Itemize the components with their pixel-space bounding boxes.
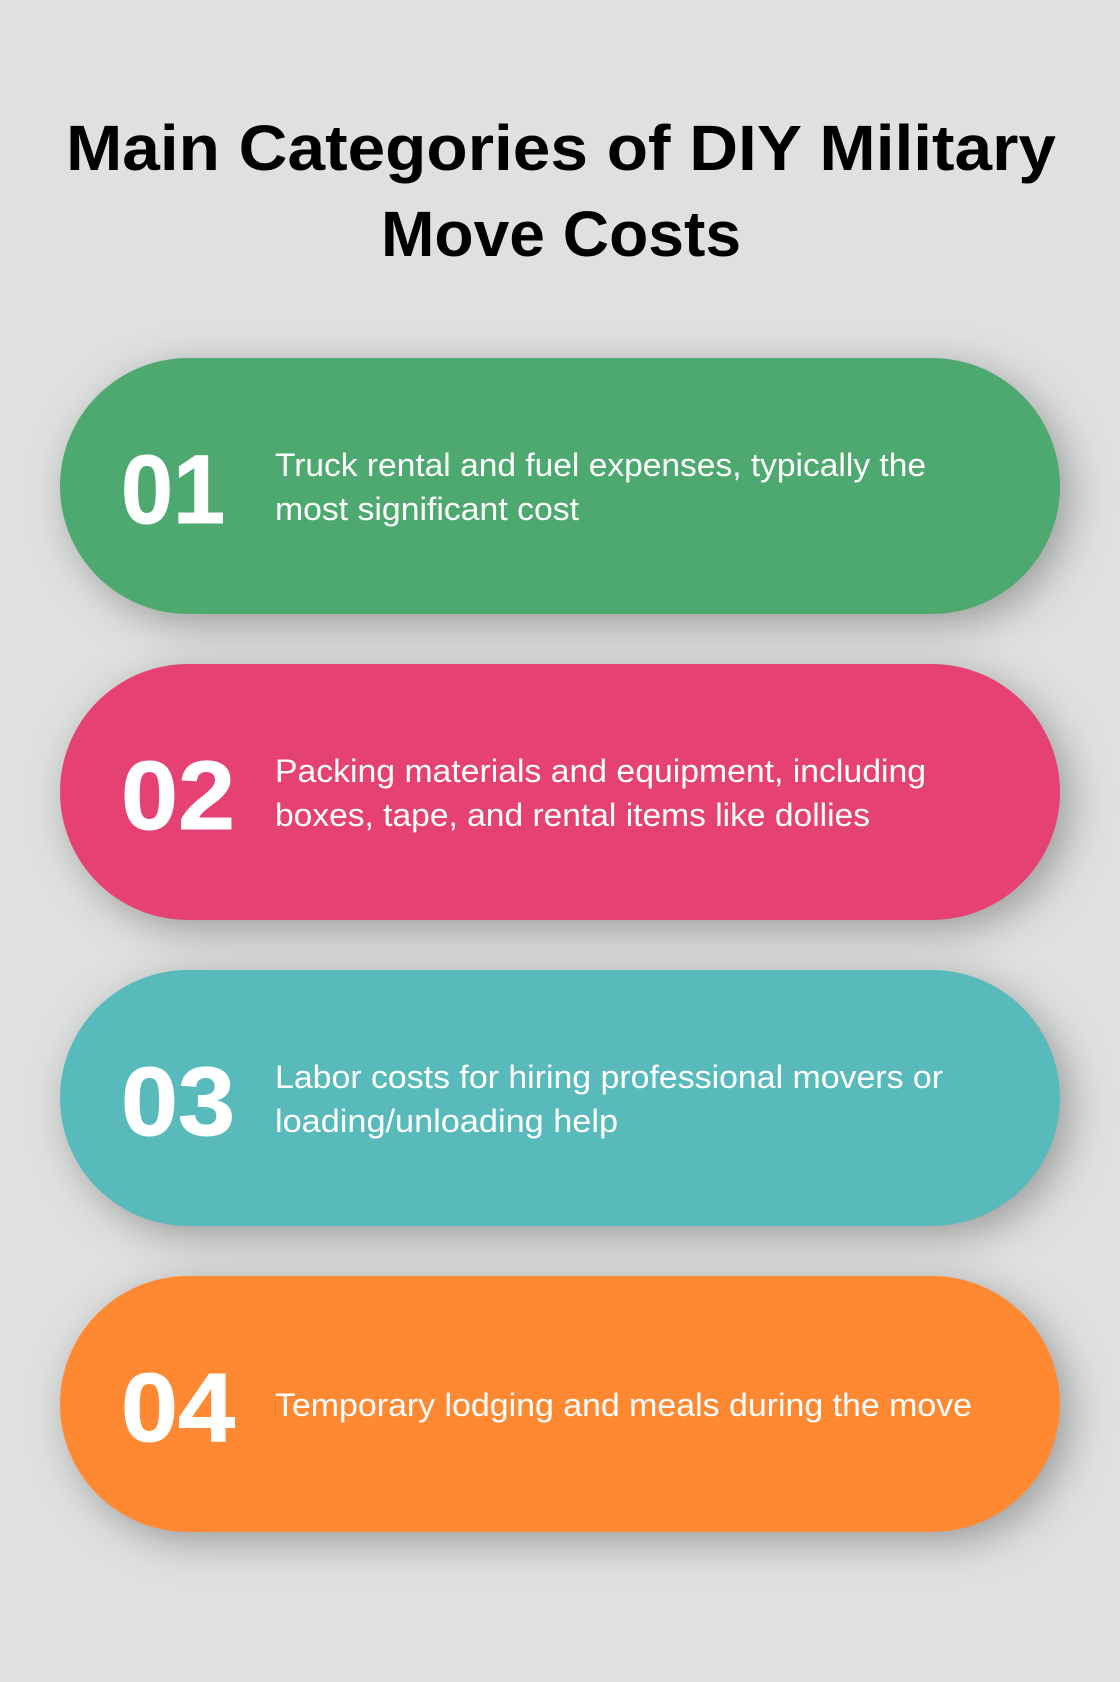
description text: boxes, tape, and rental items like dollies [275, 797, 870, 833]
pill background: orange [60, 1276, 1060, 1532]
panel: packing materials [60, 664, 1060, 920]
title [66, 112, 1056, 270]
pill background: green [60, 358, 1060, 614]
description text [275, 447, 926, 527]
description text: Temporary lodging and meals during the move [275, 1387, 972, 1423]
description text: most significant cost [275, 491, 579, 527]
number 04: 04 [121, 1353, 235, 1462]
number 03: 03 [121, 1047, 235, 1156]
title: Main Categories of DIY Military [66, 112, 1056, 184]
description text [275, 1059, 943, 1139]
number 01: 01 [121, 435, 225, 544]
pill background: teal [60, 970, 1060, 1226]
description text [275, 753, 926, 833]
pill background: pink [60, 664, 1060, 920]
panel: truck rental and fuel [60, 358, 1060, 614]
title: Move Costs [381, 198, 741, 270]
panel: temporary lodging [60, 1276, 1060, 1532]
number 02: 02 [121, 741, 235, 850]
description text: Truck rental and fuel expenses, typically the [275, 447, 926, 483]
panel: labor costs [60, 970, 1060, 1226]
description text: Packing materials and equipment, including [275, 753, 926, 789]
description text: loading/unloading help [275, 1103, 618, 1139]
description text: Labor costs for hiring professional movers or [275, 1059, 943, 1095]
